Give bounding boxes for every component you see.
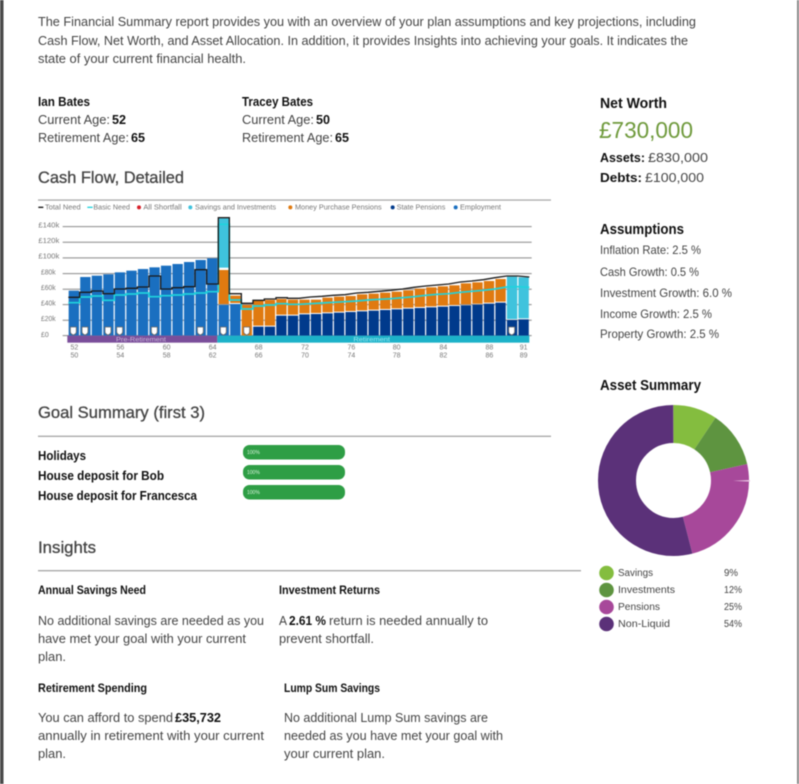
insight: retirement spending: plan.	[38, 747, 66, 761]
insight: retirement spending: annually in retirement with your current	[38, 729, 265, 743]
panel: assumptions	[600, 222, 732, 341]
goal: House deposit for Bob: 100%	[247, 470, 260, 476]
insight: retirement spending: £35,732	[175, 711, 221, 725]
goal: Holidays: 100%	[247, 450, 260, 456]
age axis: 58	[163, 352, 171, 359]
heading: asset summary: Asset Summary	[600, 378, 701, 394]
age axis: 89	[520, 352, 528, 359]
age axis: 84	[439, 344, 447, 351]
insight: lump sum savings	[284, 683, 503, 761]
goal: House deposit for Bob: House deposit for Bob	[38, 469, 164, 483]
chart legend: Basic Need	[93, 205, 130, 212]
age axis: 74	[347, 352, 355, 359]
panel: net worth: Net Worth	[600, 96, 667, 112]
chart legend: Total Need	[45, 205, 81, 212]
panel: net worth: £830,000	[648, 151, 708, 165]
goal: Holidays	[38, 445, 345, 463]
person: Ian Bates: 65	[131, 131, 145, 145]
panel: assumptions: Property Growth: 2.5 %	[600, 327, 719, 341]
panel: net worth: Assets:	[600, 151, 645, 165]
age axis	[70, 344, 528, 359]
chart legend: Money Purchase Pensions	[295, 205, 382, 212]
y axis labels: £20k	[41, 316, 56, 323]
y axis labels: £100k	[38, 254, 60, 261]
age axis: 52	[70, 344, 78, 351]
asset legend: Pensions	[618, 602, 660, 613]
insight: lump sum savings: needed as you have met your goal with	[284, 729, 503, 743]
y axis labels	[38, 222, 60, 339]
heading: Cash Flow, Detailed: Cash Flow, Detailed	[38, 168, 184, 187]
insight: annual savings need: Annual Savings Need	[38, 585, 146, 597]
savings and investments bars	[219, 218, 529, 319]
employment bars	[69, 258, 240, 336]
y axis labels: £140k	[38, 222, 60, 229]
age axis: 78	[393, 352, 401, 359]
person: Ian Bates: 52	[112, 113, 126, 127]
person: Ian Bates	[38, 95, 145, 145]
insight: lump sum savings: No additional Lump Sum savings are	[284, 711, 488, 725]
insight: annual savings need	[38, 585, 264, 664]
goal: House deposit for Francesca: House deposit for Francesca	[38, 489, 198, 503]
chart legend	[38, 205, 501, 212]
panel: assumptions: Income Growth: 2.5 %	[600, 307, 712, 321]
asset legend	[599, 566, 742, 631]
person: Tracey Bates: 50	[316, 113, 330, 127]
person: Tracey Bates	[242, 95, 349, 145]
panel: net worth: Debts:	[600, 171, 642, 185]
heading: goal summary: Goal Summary (first 3)	[38, 403, 205, 422]
insight: lump sum savings: your current plan.	[284, 747, 385, 761]
panel: net worth: £730,000	[599, 117, 693, 143]
insight: annual savings need: plan.	[38, 650, 66, 664]
panel: assumptions: Investment Growth: 6.0 %	[600, 286, 732, 300]
age axis: 72	[301, 344, 309, 351]
y axis labels: £0	[41, 332, 49, 339]
person: Tracey Bates: Retirement Age:	[242, 131, 333, 145]
panel: assumptions: Cash Growth: 0.5 %	[600, 265, 699, 279]
chart legend: Employment	[460, 205, 501, 212]
insight: lump sum savings: Lump Sum Savings	[284, 683, 380, 695]
intro text	[38, 15, 696, 66]
panel: assumptions: Assumptions	[600, 222, 684, 238]
insight: annual savings need: have met your goal with your current	[38, 632, 247, 646]
age axis: 86	[485, 352, 493, 359]
total need line	[68, 218, 529, 303]
insight: investment returns: prevent shortfall.	[279, 632, 374, 646]
age axis: 54	[116, 352, 124, 359]
asset legend: 54%	[724, 619, 742, 630]
insight: investment returns: A	[279, 614, 288, 628]
age axis: 88	[485, 344, 493, 351]
pre-retirement band: Pre-Retirement	[116, 336, 166, 343]
cash flow chart	[38, 205, 532, 359]
retirement event markers	[70, 327, 515, 335]
goal: House deposit for Francesca: 100%	[247, 490, 260, 496]
chart legend: Savings and Investments	[195, 205, 277, 212]
person: Ian Bates: Current Age:	[38, 113, 110, 127]
goal: House deposit for Bob	[38, 465, 345, 483]
panel: assumptions: Inflation Rate: 2.5 %	[600, 243, 701, 257]
retirement band: Retirement	[353, 336, 390, 343]
goal: House deposit for Francesca	[38, 485, 345, 503]
age axis: 66	[255, 352, 263, 359]
insight: investment returns: return is needed annually to	[329, 614, 488, 628]
asset legend: Non-Liquid	[618, 619, 670, 630]
chart legend: State Pensions	[397, 205, 446, 212]
insight: retirement spending: You can afford to spend	[38, 711, 173, 725]
age axis: 70	[301, 352, 309, 359]
age axis: 91	[520, 344, 528, 351]
chart legend: All Shortfall	[143, 205, 182, 212]
person: Tracey Bates: Current Age:	[242, 113, 314, 127]
y axis labels: £120k	[38, 238, 60, 245]
age axis: 82	[439, 352, 447, 359]
insight: annual savings need: No additional savings are needed as you	[38, 614, 264, 628]
intro text: Cash Flow, Net Worth, and Asset Allocation. In addition, it provides Insights into achieving your goals. It indicates the	[38, 34, 688, 48]
goal: Holidays: Holidays	[38, 449, 86, 463]
panel: net worth: £100,000	[645, 171, 704, 185]
person: Ian Bates: Ian Bates	[38, 95, 90, 109]
age axis: 64	[209, 344, 217, 351]
asset legend: 12%	[724, 585, 742, 596]
asset legend: Savings	[618, 568, 653, 579]
insight: investment returns	[279, 585, 488, 646]
age axis: 76	[347, 344, 355, 351]
insight: investment returns: 2.61 %	[289, 614, 326, 628]
retirement band	[217, 336, 529, 343]
person: Tracey Bates: 65	[335, 131, 349, 145]
insight: investment returns: Investment Returns	[279, 585, 380, 597]
age axis: 68	[255, 344, 263, 351]
intro text: The Financial Summary report provides you with an overview of your plan assumptions and key projections, including	[38, 15, 696, 29]
state pension bars	[253, 303, 529, 336]
intro text: state of your current financial health.	[38, 52, 246, 66]
age axis: 56	[116, 344, 124, 351]
y axis labels: £60k	[41, 285, 56, 292]
asset legend: Investments	[618, 585, 675, 596]
panel: net worth	[599, 96, 708, 185]
money purchase pension bars	[219, 270, 506, 336]
pre-retirement band	[67, 336, 217, 343]
insight: retirement spending	[38, 683, 265, 761]
age axis: 80	[393, 344, 401, 351]
age axis: 50	[70, 352, 78, 359]
asset legend: 25%	[724, 602, 742, 613]
y axis labels: £80k	[41, 269, 56, 276]
y axis labels: £40k	[41, 300, 56, 307]
asset legend: 9%	[724, 568, 738, 579]
person: Ian Bates: Retirement Age:	[38, 131, 129, 145]
donut chart: asset summary	[617, 424, 750, 537]
basic need line	[68, 224, 529, 309]
age axis: 62	[209, 352, 217, 359]
insight: retirement spending: Retirement Spending	[38, 683, 147, 695]
age axis: 60	[163, 344, 171, 351]
person: Tracey Bates: Tracey Bates	[242, 95, 313, 109]
heading: insights: Insights	[38, 538, 96, 557]
